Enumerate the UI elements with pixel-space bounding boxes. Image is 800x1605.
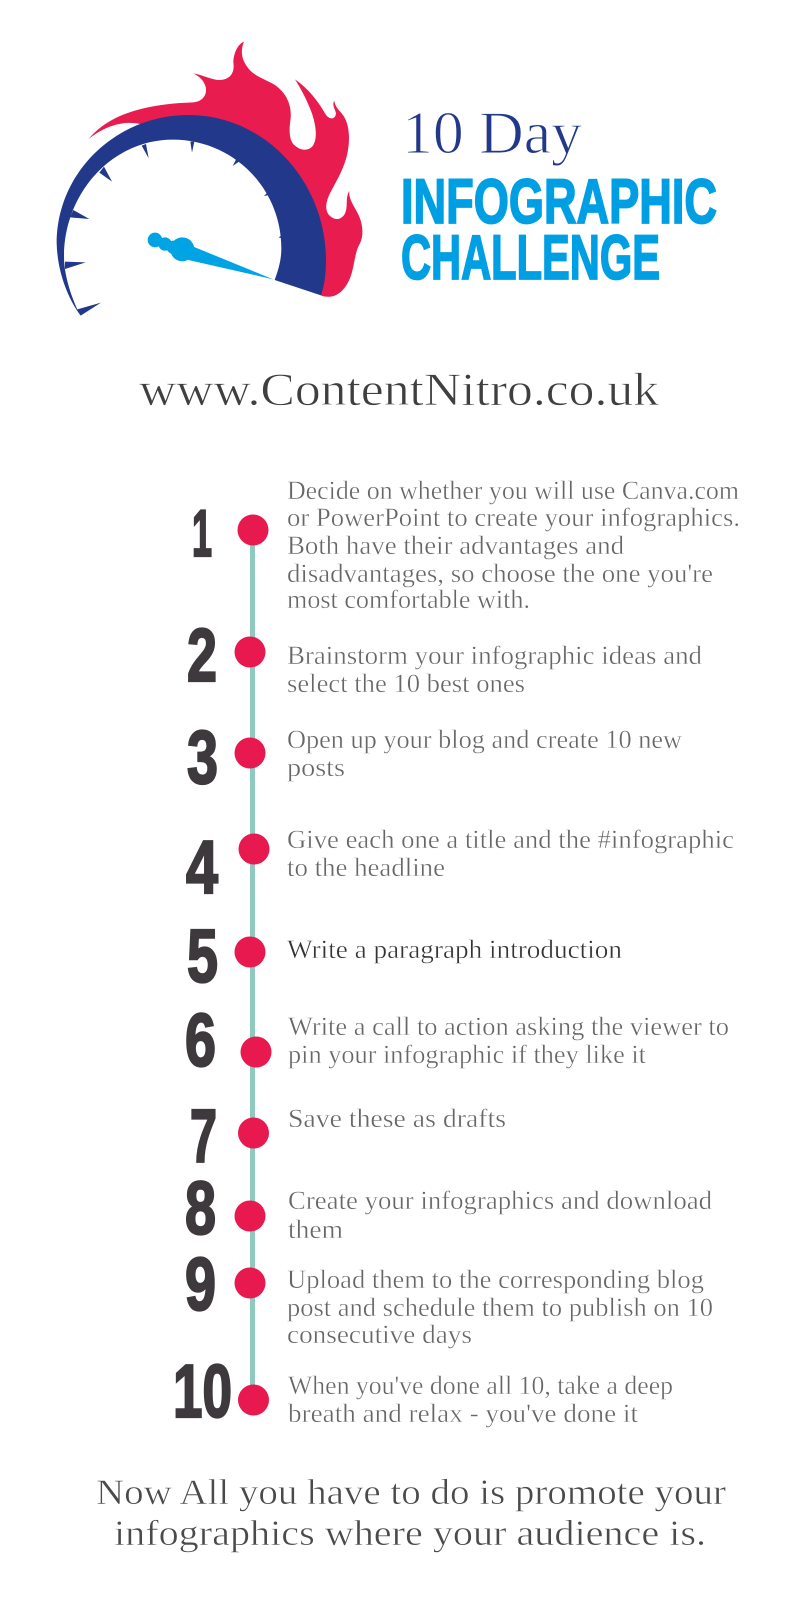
step 4: to the headline (287, 852, 445, 882)
title: CHALLENGE: CHALLENGE (401, 223, 660, 293)
step 2: Brainstorm your infographic ideas and (287, 640, 702, 670)
step 1: disadvantages, so choose the one you're (287, 558, 713, 588)
step 5 (187, 914, 622, 998)
step 7 (190, 1094, 506, 1178)
step 6: Write a call to action asking the viewer to (288, 1011, 729, 1041)
step 5: 5 (187, 914, 218, 998)
step 10: breath and relax - you've done it (288, 1398, 639, 1428)
closing statement (96, 1472, 726, 1553)
step 2: 2 (187, 613, 217, 697)
step 6 (185, 998, 729, 1082)
step 1: Decide on whether you will use Canva.com (287, 475, 739, 505)
step 1: most comfortable with. (287, 584, 530, 614)
website url: www.ContentNitro.co.uk (139, 364, 660, 416)
step 3: posts (287, 752, 345, 782)
icon: flaming speedometer (57, 42, 362, 316)
step 6: pin your infographic if they like it (288, 1039, 647, 1069)
step 9: Upload them to the corresponding blog (287, 1264, 704, 1294)
step 9 (185, 1242, 713, 1349)
step 4 (186, 824, 734, 909)
step 7: Save these as drafts (288, 1103, 506, 1133)
step 8 (185, 1166, 712, 1250)
needle (148, 233, 273, 279)
step 4: Give each one a title and the #infographic (287, 824, 734, 854)
step 1 (192, 475, 740, 614)
gauge arc (57, 115, 326, 316)
closing statement: Now All you have to do is promote your (96, 1472, 726, 1512)
step 8: Create your infographics and download (288, 1185, 712, 1215)
step 3: 3 (187, 715, 218, 799)
step 7: 7 (190, 1094, 217, 1178)
step 10: 10 (173, 1349, 232, 1433)
step 6: 6 (185, 998, 216, 1082)
step 9: post and schedule them to publish on 10 (287, 1292, 713, 1322)
step 3 (187, 715, 683, 799)
step 1: 1 (192, 496, 212, 570)
step 2 (187, 613, 702, 698)
timeline line (250, 530, 255, 1400)
step 1: or PowerPoint to create your infographics. (287, 502, 740, 532)
step 2: select the 10 best ones (287, 668, 525, 698)
step 4: 4 (186, 825, 218, 909)
step 1: Both have their advantages and (287, 530, 624, 560)
title: 10 Day: 10 Day (402, 100, 582, 166)
step 9: 9 (185, 1242, 216, 1326)
step 10 (173, 1349, 673, 1433)
gauge ticks (65, 142, 282, 269)
step 8: them (288, 1214, 343, 1244)
flame (88, 42, 362, 297)
closing statement: infographics where your audience is. (114, 1513, 706, 1553)
step 3: Open up your blog and create 10 new (287, 724, 683, 754)
step 5: Write a paragraph introduction (287, 934, 622, 964)
step 10: When you've done all 10, take a deep (288, 1370, 673, 1400)
step 9: consecutive days (287, 1319, 472, 1349)
step 8: 8 (185, 1166, 216, 1250)
